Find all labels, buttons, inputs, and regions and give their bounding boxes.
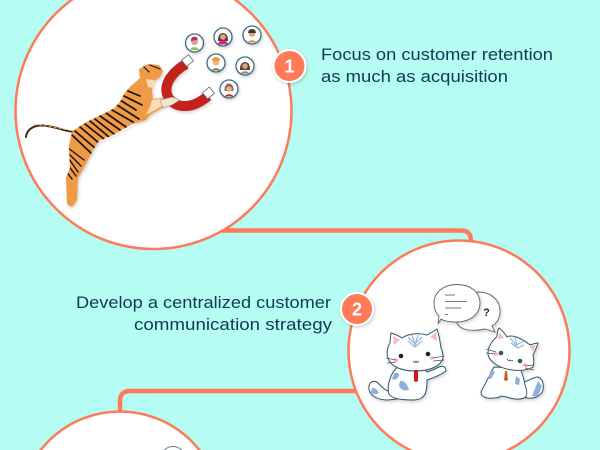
icon: red horseshoe magnet — [166, 55, 215, 106]
kitten body — [388, 364, 446, 400]
tiger chest, jaw and belly — [146, 79, 174, 114]
avatar 4 — [207, 54, 225, 72]
icons: customer avatars — [186, 26, 261, 98]
avatar 5 — [236, 57, 254, 75]
bubble with text lines — [434, 284, 480, 324]
text: step 2: Develop a centralized customer — [76, 294, 332, 312]
badge: number 2: 2 — [352, 300, 362, 320]
tiger tail — [26, 125, 74, 137]
question mark: ? — [483, 307, 490, 319]
illustration: tiger leaping — [26, 64, 176, 207]
right kitten details — [486, 332, 542, 396]
bubble with question mark — [456, 292, 500, 332]
illustration: right kitten — [481, 328, 543, 399]
kitten head — [387, 329, 443, 371]
kitten head — [488, 328, 538, 370]
left kitten details — [371, 332, 444, 394]
tiger paw on magnet — [160, 97, 180, 108]
panel: circle step 2 — [348, 240, 570, 450]
badge: number 1 — [274, 50, 306, 82]
avatar 2 — [214, 28, 232, 46]
panel: circle step 3 — [19, 412, 221, 450]
connector: step 2 to step 3 — [120, 391, 365, 412]
icon: partial avatar in step 3 — [160, 446, 186, 450]
badge: number 1: 1 — [284, 56, 295, 76]
avatar 6 — [220, 80, 238, 98]
text: step 1: Focus on customer retention — [321, 46, 553, 64]
kitten tail — [522, 377, 543, 398]
kitten body — [481, 367, 527, 399]
connector: step 1 to step 2 — [222, 230, 471, 244]
panel: circle step 1 — [16, 0, 292, 249]
tiger stripes — [66, 65, 160, 179]
text: step 2: communication strategy — [134, 316, 333, 334]
avatar 3 — [243, 26, 261, 44]
kitten tail — [369, 381, 397, 400]
avatar 1 — [186, 34, 204, 52]
illustration: left kitten — [369, 329, 446, 400]
icon: speech bubbles — [434, 284, 500, 332]
badge: number 2 — [341, 293, 373, 325]
text: step 1: as much as acquisition — [321, 68, 508, 86]
tiger body — [66, 64, 176, 207]
